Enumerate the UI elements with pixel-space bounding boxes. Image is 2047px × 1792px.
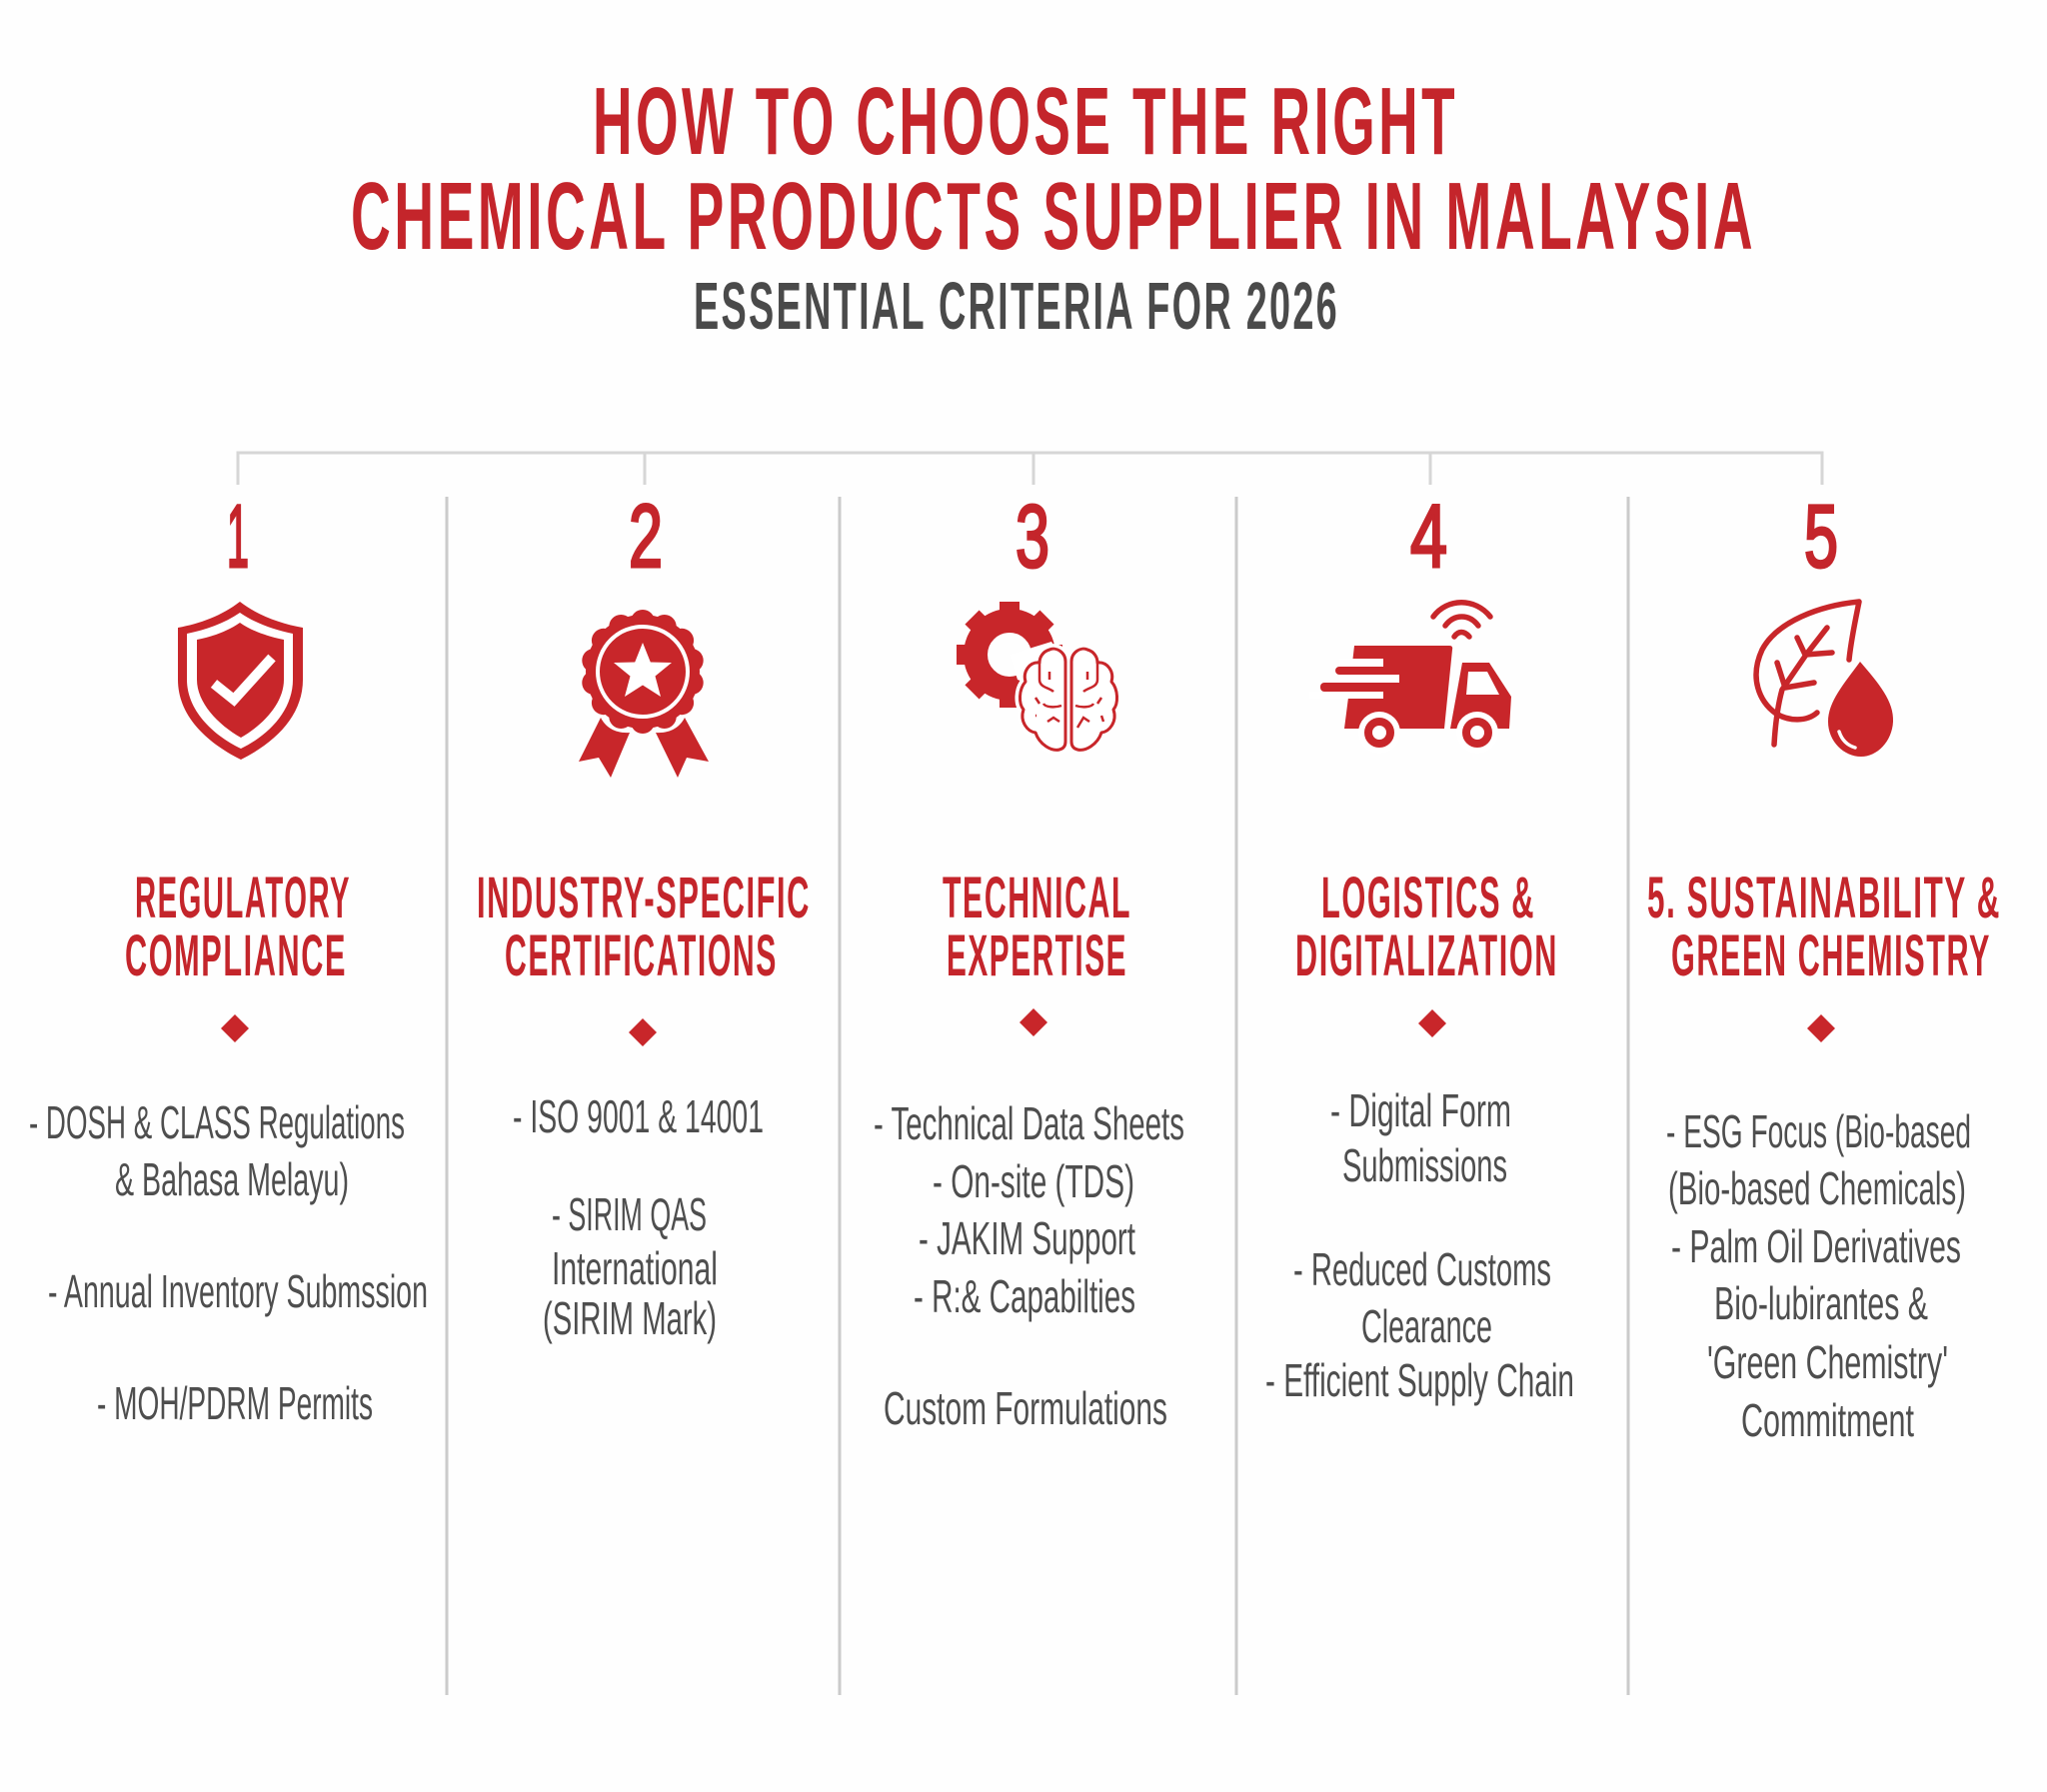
panel: industry-specific certifications [477,486,811,1344]
body text: - JAKIM Support [919,1212,1135,1264]
body text [874,1097,1184,1434]
body text: - Technical Data Sheets [874,1097,1184,1149]
diamond marker [1807,1014,1835,1042]
icon: shield with check [178,602,303,760]
heading: TECHNICAL [943,866,1131,930]
body text: - Digital Form [1330,1084,1511,1136]
icon: award rosette [579,610,709,778]
body text: Submissions [1342,1139,1507,1191]
heading: COMPLIANCE [125,923,347,988]
panel: regulatory compliance: 1 [227,486,249,586]
number 4: 4 [1410,486,1447,586]
body text: - Annual Inventory Submssion [48,1265,428,1317]
body text: Clearance [1361,1300,1492,1352]
heading: REGULATORY [135,866,351,930]
panel: technical expertise [874,486,1184,1434]
body text: - SIRIM QAS [552,1188,707,1240]
number 2: 2 [629,486,663,586]
body text: Bio-lubirantes & [1714,1277,1928,1329]
body text: - R:& Capabilties [914,1270,1135,1322]
connector bracket [238,453,1822,485]
body text: (SIRIM Mark) [543,1292,717,1344]
body text: & Bahasa Melayu) [115,1153,349,1205]
diamond marker [1418,1009,1446,1037]
subtitle: ESSENTIAL CRITERIA FOR 2026 [694,269,1339,344]
heading [943,866,1131,988]
diamond marker [221,1014,249,1042]
body text [1265,1084,1574,1406]
body text: - Reduced Customs [1293,1243,1551,1295]
heading: LOGISTICS & [1321,866,1535,930]
number 5: 5 [1804,486,1838,586]
body text: - MOH/PDRM Permits [97,1377,373,1429]
body text [513,1090,764,1344]
body text: - ISO 9001 & 14001 [513,1090,764,1142]
panel: logistics and digitalization [1265,486,1574,1406]
heading: DIGITALIZATION [1295,923,1558,988]
heading: INDUSTRY-SPECIFIC [477,866,811,930]
body text: - On-site (TDS) [933,1155,1134,1207]
body text: Custom Formulations [884,1382,1167,1434]
body text: Commitment [1741,1394,1914,1446]
panel: regulatory compliance [29,486,428,1429]
diamond marker [629,1018,657,1046]
diamond marker [1020,1008,1047,1036]
heading: CERTIFICATIONS [505,923,778,988]
heading [1647,866,2001,988]
number 3: 3 [1016,486,1049,586]
body text: International [552,1242,718,1294]
title [351,68,1756,270]
body text [1666,1105,1971,1446]
panel: sustainability and green chemistry [1647,486,2001,1446]
body text: - Efficient Supply Chain [1265,1354,1574,1406]
icon: leaf and drop [1756,602,1893,757]
icon: gear and brain [957,602,1117,750]
heading [1295,866,1558,988]
heading: EXPERTISE [947,923,1127,988]
heading [477,866,811,988]
icon: delivery truck with wifi [1309,603,1511,754]
heading [125,866,351,988]
body text: - DOSH & CLASS Regulations [29,1096,405,1148]
body text [29,1096,428,1429]
